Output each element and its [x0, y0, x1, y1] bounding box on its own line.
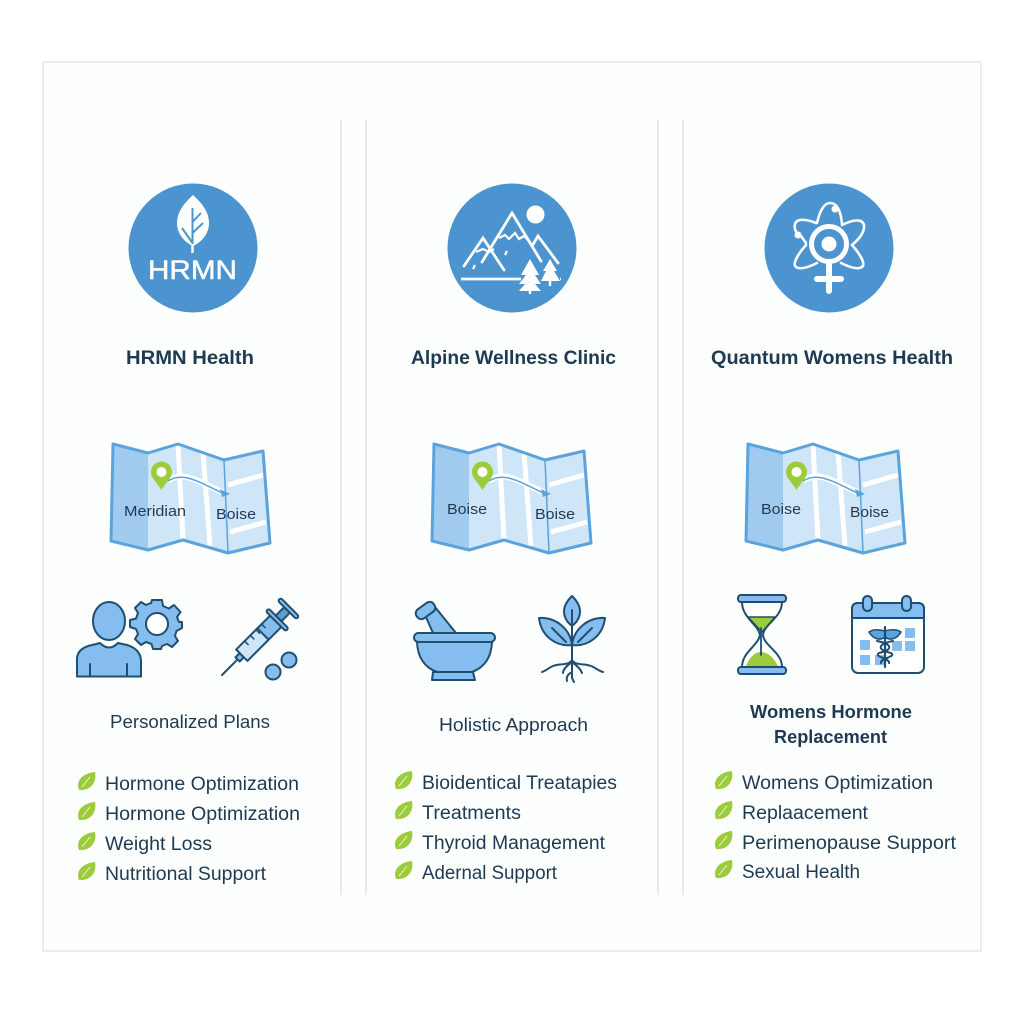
icon: calendar with caduceus [852, 596, 924, 673]
icon: hourglass [738, 595, 786, 674]
map: Meridian to Boise [111, 444, 270, 553]
checklist: HRMN services: Hormone Optimization [105, 774, 299, 795]
icon: HRMN leaf logo [128, 184, 258, 312]
checklist: HRMN services [78, 772, 300, 885]
checklist: HRMN services: Nutritional Support [105, 864, 267, 885]
icon: plant with roots [539, 596, 605, 682]
icon: HRMN leaf logo: HRMN [148, 255, 237, 285]
map: Boise to Boise: Boise [447, 501, 487, 518]
map: Boise to Boise [746, 444, 905, 553]
map: Meridian to Boise: Meridian [124, 503, 186, 520]
map: Boise to Boise: Boise [850, 504, 889, 521]
subheading: Personalized Plans: Personalized Plans [110, 712, 270, 732]
subheading: Womens Hormone Replacement [750, 702, 912, 747]
checklist: Quantum services: Replaacement [742, 803, 869, 824]
icon: mortar and pestle [414, 600, 495, 680]
subheading: Holistic Approach: Holistic Approach [439, 715, 588, 735]
icon: person with gear [77, 600, 182, 676]
checklist: Alpine services: Bioidentical Treatapies [422, 773, 617, 794]
checklist: Alpine services: Treatments [422, 803, 521, 824]
panel: HRMN Health [77, 184, 300, 885]
map: Boise to Boise: Boise [761, 501, 801, 518]
checklist: Quantum services [715, 771, 957, 883]
icon: atom and female symbol logo [764, 184, 894, 312]
subheading: Womens Hormone Replacement: Womens Hormone [750, 702, 912, 722]
heading: Alpine Wellness Clinic: Alpine Wellness Clinic [411, 348, 616, 369]
checklist: Quantum services: Womens Optimization [742, 773, 933, 794]
checklist: HRMN services: Hormone Optimization [105, 804, 300, 825]
heading: HRMN Health: HRMN Health [126, 348, 254, 369]
heading: Quantum Womens Health: Quantum Womens Health [711, 348, 953, 369]
map: Boise to Boise: Boise [535, 506, 575, 523]
map: Meridian to Boise: Boise [216, 506, 256, 523]
checklist: Alpine services: Thyroid Management [422, 833, 606, 854]
panel: Alpine Wellness Clinic [395, 184, 617, 884]
checklist: HRMN services: Weight Loss [105, 834, 212, 855]
subheading: Womens Hormone Replacement: Replacement [774, 727, 887, 747]
checklist: Quantum services: Sexual Health [742, 862, 860, 883]
panel: Quantum Womens Health [711, 184, 957, 883]
icon: mountain logo [448, 184, 576, 312]
checklist: Alpine services [395, 771, 617, 884]
checklist: Alpine services: Adernal Support [422, 863, 558, 884]
map: Boise to Boise [432, 444, 591, 553]
checklist: Quantum services: Perimenopause Support [742, 833, 957, 854]
icon: syringe and pills [212, 597, 300, 685]
outer frame [43, 62, 981, 951]
